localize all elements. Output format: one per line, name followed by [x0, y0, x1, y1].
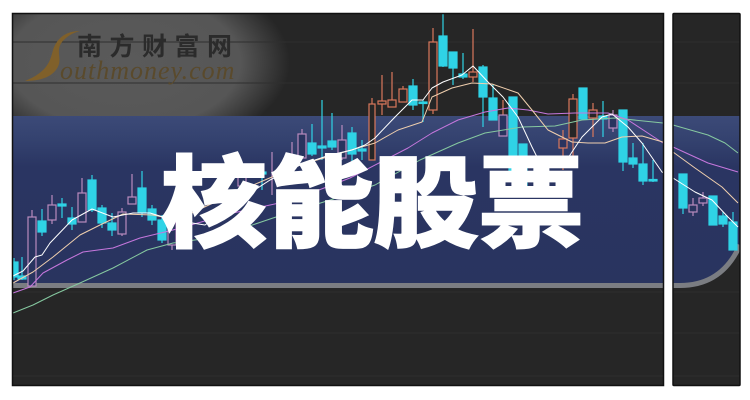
- logo Chinese name: 南方财富网: [77, 27, 240, 63]
- candlestick chart: [13, 14, 737, 286]
- moving average lines: [13, 66, 738, 313]
- title: 股: [373, 149, 479, 260]
- title: 票: [478, 149, 584, 260]
- line: magenta average: [13, 108, 738, 293]
- logo S swoosh: [25, 31, 80, 81]
- title: [161, 149, 584, 260]
- cyan falling candles: [13, 14, 737, 280]
- panel: blue title band: [12, 116, 740, 286]
- title: 核: [161, 149, 267, 260]
- logo: southmoney: [25, 27, 240, 85]
- line: peach average: [13, 83, 738, 283]
- line: teal long average: [13, 118, 738, 313]
- logo domain: outhmoney.com: [60, 56, 235, 85]
- line: white short average: [13, 66, 738, 276]
- title: 能: [268, 149, 374, 260]
- hollow rising candles: [28, 110, 707, 286]
- orange rising candles: [369, 28, 597, 170]
